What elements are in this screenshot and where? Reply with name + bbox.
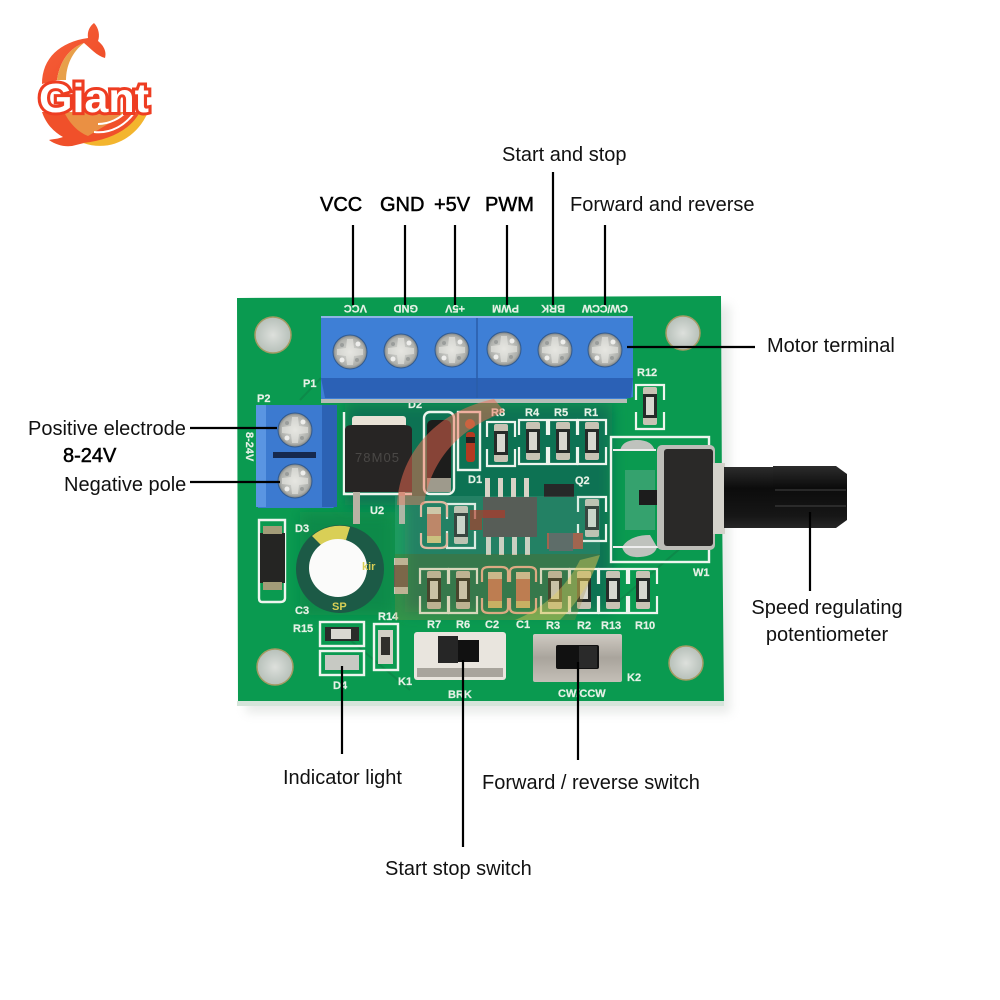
callout lines [190, 172, 810, 847]
silkscreen labels: R4 [525, 407, 540, 419]
label: Start stop switch: Start stop switch [385, 858, 532, 880]
silkscreen labels: P2 [257, 393, 270, 405]
silkscreen labels: R14 [378, 611, 399, 623]
label: Positive electrode: Positive electrode [28, 418, 186, 440]
silkscreen outlines [259, 412, 709, 675]
component: slide switch K1 [414, 632, 506, 680]
label: GND: GND [380, 194, 424, 216]
silkscreen labels: R6 [456, 619, 470, 631]
label: Motor terminal: Motor terminal [767, 335, 895, 357]
label: Indicator light: Indicator light [283, 767, 402, 789]
component: diodes D2 D3 D1 [260, 419, 475, 590]
silkscreen labels: Q2 [575, 475, 590, 487]
silkscreen labels: 8-24V [243, 432, 255, 462]
component: potentiometer with knob [613, 440, 847, 557]
label: VCC: VCC [320, 194, 362, 216]
label: 8-24V: 8-24V [63, 445, 117, 467]
silkscreen labels: CW/CCW [558, 688, 606, 700]
label: Forward / reverse switch: Forward / reverse switch [482, 772, 700, 794]
label: Start and stop: Start and stop [502, 144, 627, 166]
silkscreen labels: R1 [584, 407, 598, 419]
silkscreen labels: K2 [627, 672, 641, 684]
component: electrolytic capacitor: SP [332, 601, 347, 613]
icon: mounting holes [255, 316, 703, 685]
label: Speed regulating potentiometer: potentiometer [766, 624, 888, 646]
silkscreen labels: R13 [601, 620, 621, 632]
silkscreen labels: BRK [448, 689, 472, 701]
watermark: translucent logo over board centre [395, 399, 600, 620]
logo wordmark: Giant [39, 75, 149, 121]
silkscreen labels [243, 302, 710, 701]
silkscreen labels: R8 [491, 407, 505, 419]
silkscreen labels: R15 [293, 623, 313, 635]
silkscreen labels: BRK [541, 302, 565, 314]
silkscreen labels: VCC [344, 302, 367, 314]
label: +5V: +5V [434, 194, 471, 216]
label: Forward and reverse: Forward and reverse [570, 194, 755, 216]
silkscreen labels: PWM [492, 302, 519, 314]
silkscreen labels: D2 [408, 399, 422, 411]
component: IC and transistor [483, 478, 583, 555]
silkscreen labels: W1 [693, 567, 710, 579]
silkscreen labels: K1 [398, 676, 412, 688]
silkscreen labels: R7 [427, 619, 441, 631]
label: Speed regulating potentiometer: Speed regulating [751, 597, 903, 619]
panel: circuit board [237, 296, 847, 713]
silkscreen labels: D4 [333, 680, 348, 692]
silkscreen labels: P1 [303, 378, 316, 390]
component: voltage regulator U2 [345, 416, 412, 524]
label: Negative pole: Negative pole [64, 474, 186, 496]
silkscreen labels: +5V [444, 302, 465, 314]
component: slide switch K2 [533, 634, 622, 682]
silkscreen labels: R12 [637, 367, 657, 379]
silkscreen labels: C1 [516, 619, 530, 631]
silkscreen labels: R2 [577, 620, 591, 632]
silkscreen labels: R3 [546, 620, 560, 632]
silkscreen labels: U2 [370, 505, 384, 517]
component: voltage regulator U2: 78M05 [355, 450, 399, 465]
silkscreen labels: R10 [635, 620, 655, 632]
silkscreen labels: GND [394, 302, 418, 314]
component: power terminal block [256, 405, 337, 508]
silkscreen labels: CW/CCW [581, 302, 628, 314]
silkscreen labels: C3 [295, 605, 309, 617]
component: motor terminal block [321, 316, 633, 403]
component: electrolytic capacitor [296, 525, 384, 613]
logo: Giant whale [39, 23, 149, 146]
silkscreen labels: C2 [485, 619, 499, 631]
silkscreen labels: D1 [468, 474, 482, 486]
silkscreen labels: R5 [554, 407, 568, 419]
component: electrolytic capacitor: kir [362, 561, 376, 573]
component: SMD resistors and capacitors [325, 385, 664, 670]
silkscreen labels: D3 [295, 523, 309, 535]
label: PWM: PWM [485, 194, 534, 216]
